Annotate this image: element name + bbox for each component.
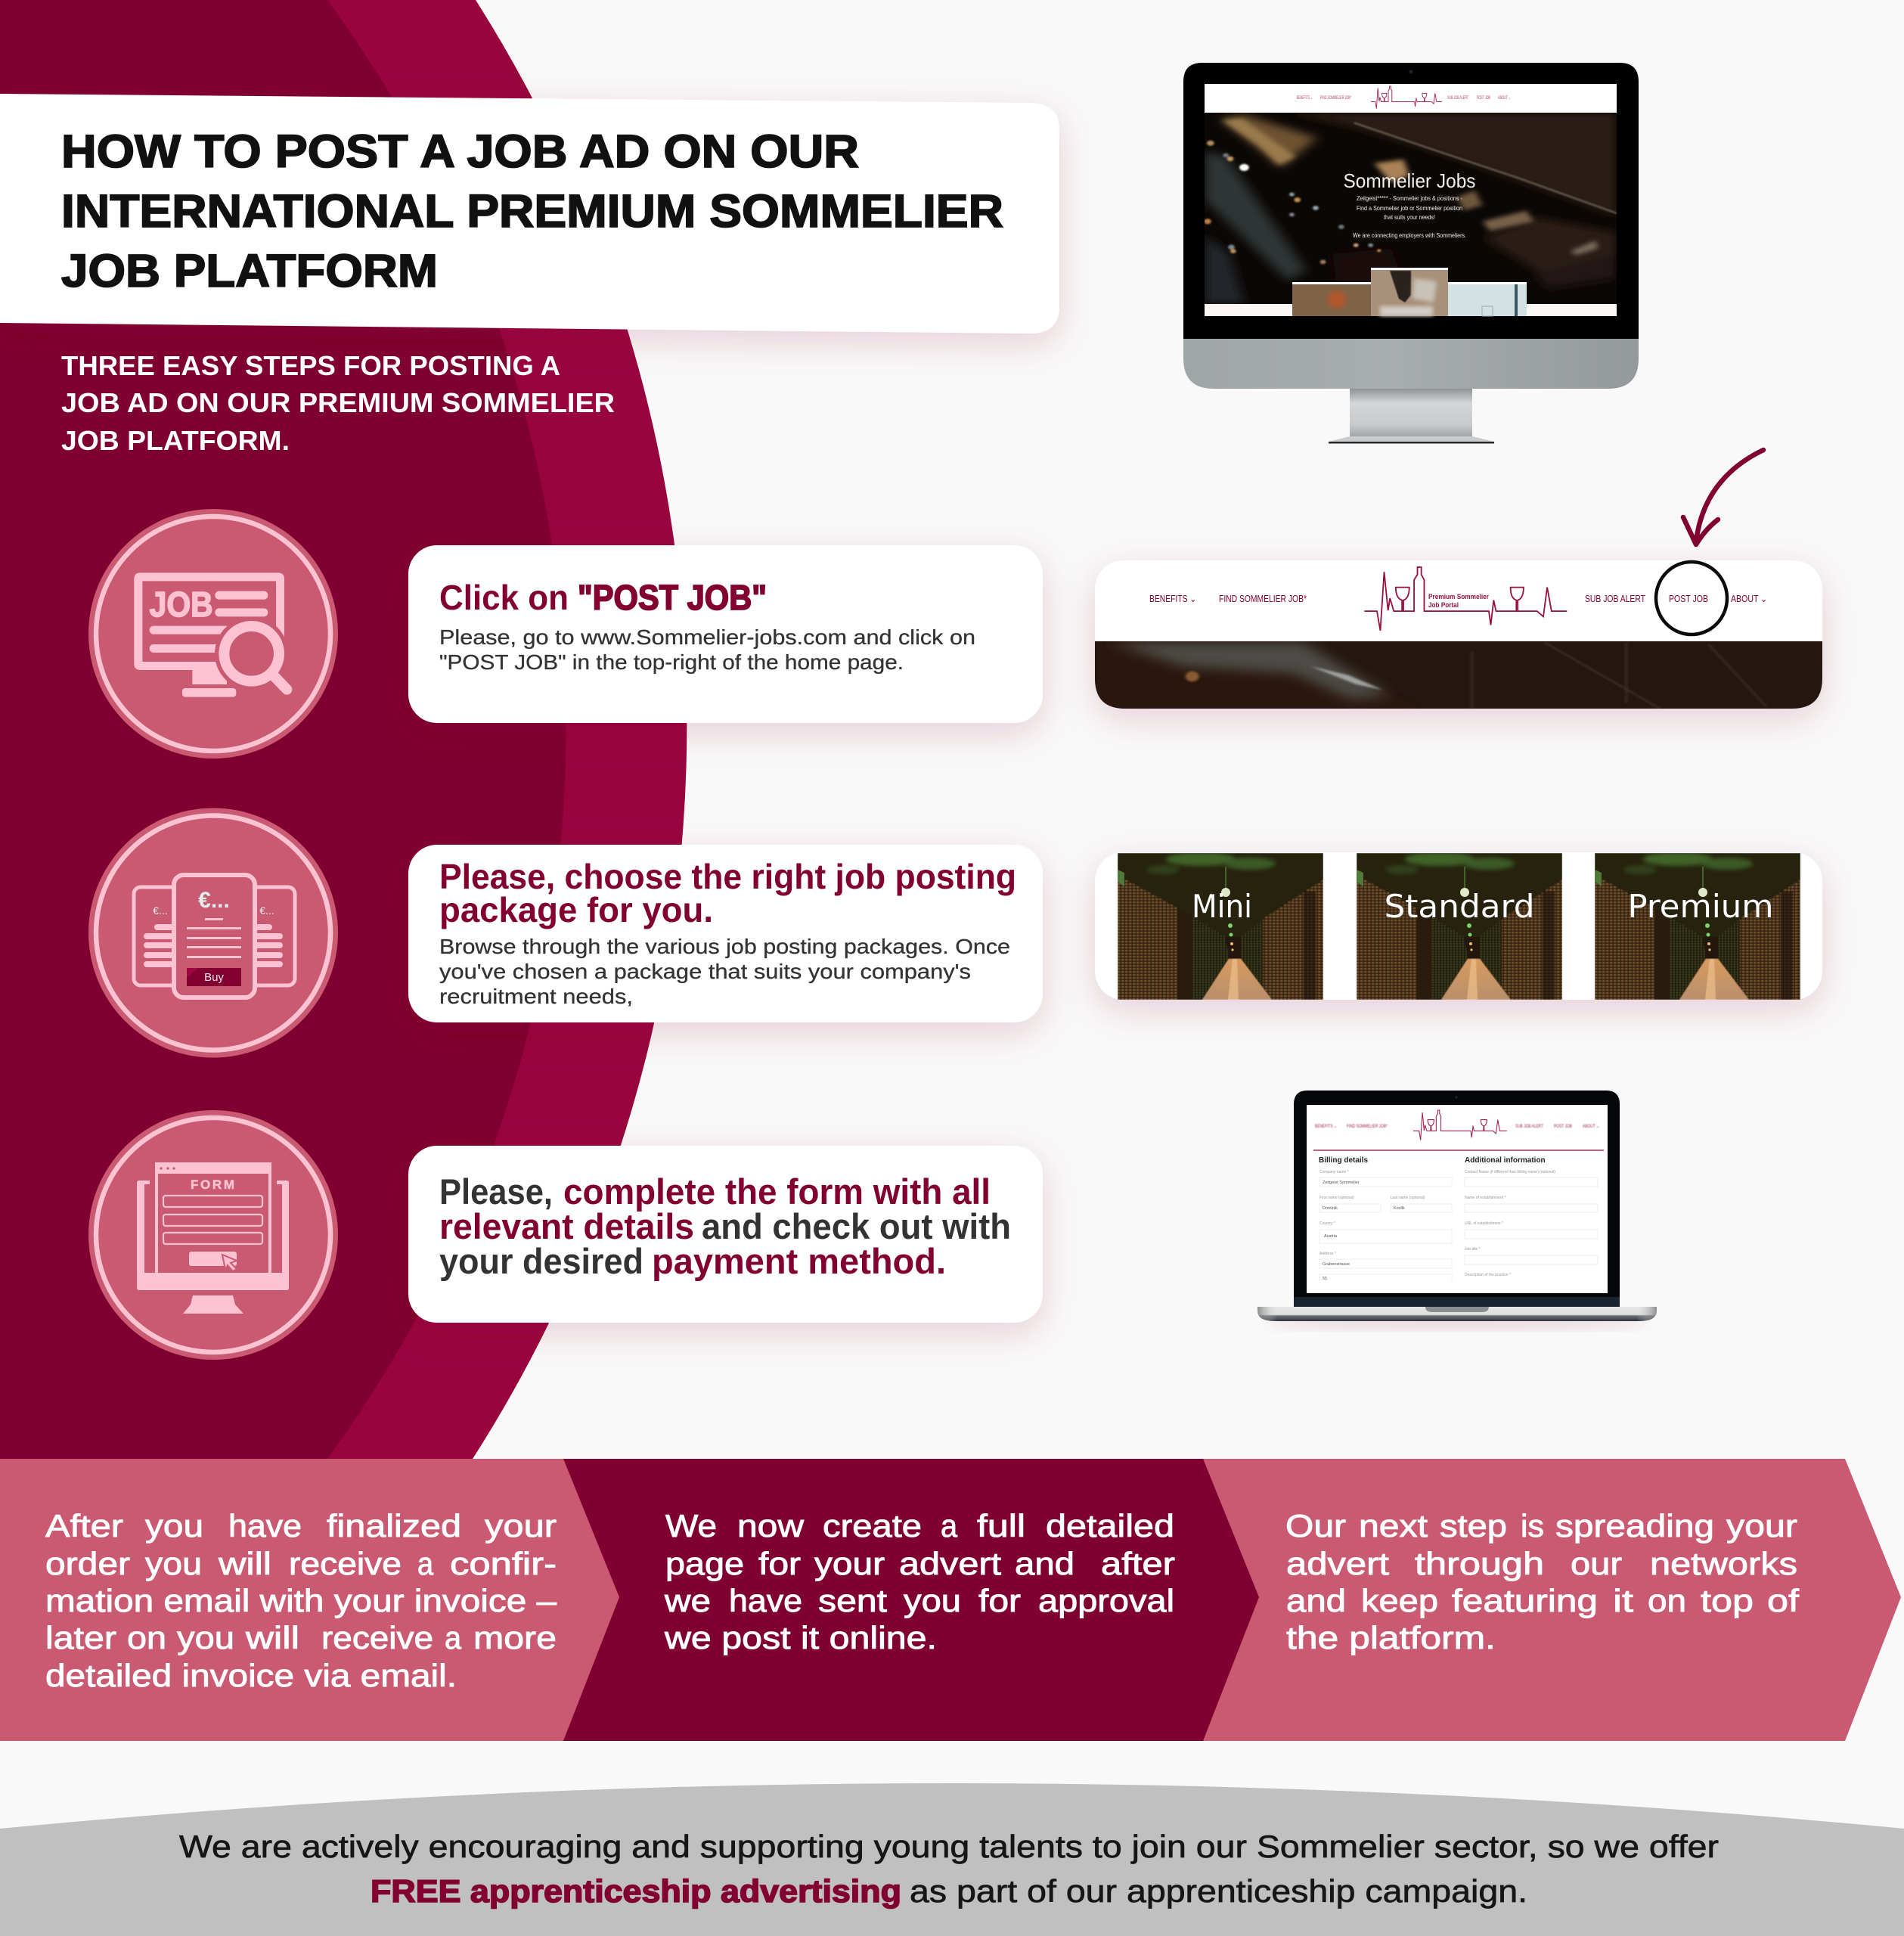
process arrow 2 <box>529 1459 1259 1741</box>
package: Standard <box>1357 852 1562 1000</box>
process text 1: on <box>127 1620 166 1655</box>
process text 3: step <box>1440 1508 1507 1544</box>
highlight circle <box>1656 562 1727 634</box>
monitor hero text: Find a Sommelier job or Sommelier position <box>1357 204 1462 212</box>
icon: pricing packages: Buy <box>204 971 224 984</box>
step 2 heading: Please, choose the right job posting <box>439 857 1016 896</box>
title: HOW TO POST A JOB AD ON OUR <box>61 126 859 177</box>
job packages strip <box>1095 852 1822 1000</box>
icon: pricing packages: €... <box>153 904 168 917</box>
process text 2: create <box>823 1508 922 1544</box>
icon: pricing packages: €... <box>259 904 274 917</box>
step 1 heading: "POST JOB" <box>578 578 767 617</box>
subtitle: JOB PLATFORM. <box>61 425 290 456</box>
process text 3: the platform. <box>1286 1620 1496 1655</box>
logo: Job Portal <box>1428 601 1459 610</box>
desktop monitor mockup <box>1183 63 1639 443</box>
package: Premium: Premium <box>1627 888 1774 925</box>
laptop form <box>1307 1156 1608 1293</box>
laptop form: Grabenstrasse <box>1323 1262 1350 1267</box>
step 2 body: Browse through the various job posting packages. Once <box>439 935 1010 958</box>
process text 3: through <box>1415 1546 1544 1581</box>
laptop form: Kozlik <box>1394 1206 1405 1211</box>
laptop nav: ABOUT ⌄ <box>1583 1124 1599 1129</box>
process text 2: page <box>665 1546 744 1581</box>
process text 2: your <box>814 1546 885 1581</box>
nav labels: SUB JOB ALERT <box>1585 594 1645 604</box>
title: JOB PLATFORM <box>61 245 438 296</box>
laptop form: Description of the position * <box>1465 1273 1511 1277</box>
laptop form: Country * <box>1319 1221 1335 1226</box>
step 3 text: and check out with <box>702 1206 1011 1246</box>
nav photo strip <box>1095 641 1822 709</box>
title card <box>0 94 1059 334</box>
laptop nav: SUB JOB ALERT <box>1515 1124 1543 1129</box>
footer text: FREE apprenticeship advertising <box>371 1873 901 1909</box>
process text 3: your <box>1726 1508 1797 1544</box>
process text 2: after <box>1101 1546 1175 1581</box>
process text 1: detailed invoice via email. <box>45 1658 457 1693</box>
laptop form: Job title * <box>1465 1247 1481 1252</box>
nav labels: ABOUT ⌄ <box>1731 594 1767 604</box>
process text 3: top <box>1701 1583 1754 1618</box>
process text 1: receive <box>289 1546 402 1581</box>
process text 1: more <box>473 1620 557 1655</box>
process text 1: you <box>145 1546 202 1581</box>
step 2 card <box>408 845 1043 1022</box>
step 1 body: "POST JOB" in the top-right of the home page. <box>439 650 904 674</box>
process text 2: a <box>941 1508 958 1544</box>
process text 1: mation email with your invoice – <box>45 1583 557 1618</box>
step 2 body: you've chosen a package that suits your company's <box>439 960 971 983</box>
footer band <box>0 1783 1904 1936</box>
process text 1: finalized <box>327 1508 461 1544</box>
process text 3: networks <box>1650 1546 1797 1581</box>
step 1 card <box>408 545 1043 723</box>
process text 3: keep <box>1361 1583 1438 1618</box>
navigation bar screenshot <box>1095 560 1822 709</box>
process text 1: will <box>218 1546 271 1581</box>
process text 3: is <box>1521 1508 1544 1544</box>
laptop form: 55 <box>1323 1277 1327 1281</box>
laptop nav <box>1315 1124 1599 1129</box>
logo <box>1364 567 1567 631</box>
laptop nav: BENEFITS ⌄ <box>1315 1124 1337 1129</box>
nav labels: POST JOB <box>1669 594 1708 604</box>
process text 1: receive <box>321 1620 433 1655</box>
package: Premium <box>1595 852 1800 1000</box>
package: Mini: Mini <box>1192 888 1252 925</box>
process text 3: on <box>1648 1583 1686 1618</box>
step 3 text: complete the form with all <box>563 1171 991 1212</box>
monitor hero text: We are connecting employers with Sommeliers. <box>1353 231 1466 239</box>
step 3 card <box>408 1146 1043 1323</box>
laptop form: Additional information <box>1465 1156 1546 1165</box>
monitor hero text: Zeitgeist***** - Sommelier jobs & positions - <box>1357 194 1462 202</box>
footer text: as part of our apprenticeship campaign. <box>910 1873 1527 1909</box>
icon: form on monitor: FORM <box>191 1177 234 1192</box>
icon: pricing packages <box>88 808 338 1057</box>
step 3 text: relevant details <box>439 1206 694 1246</box>
process text 1: After <box>45 1508 123 1544</box>
laptop form: Name of establishment * <box>1465 1196 1506 1200</box>
process text 2: We <box>665 1508 717 1544</box>
process text 1: confir- <box>450 1546 557 1581</box>
process text 3: it <box>1613 1583 1633 1618</box>
laptop form: Billing details <box>1319 1156 1368 1165</box>
process text 1: your <box>485 1508 557 1544</box>
process text 2: for <box>758 1546 801 1581</box>
laptop form: Austria <box>1324 1234 1338 1239</box>
process text 2: and <box>1015 1546 1074 1581</box>
monitor thumbnails <box>1292 268 1527 316</box>
process text 2: detailed <box>1046 1508 1174 1544</box>
monitor hero photo <box>1204 113 1617 304</box>
laptop nav: POST JOB <box>1554 1124 1572 1129</box>
step 3 text: your desired <box>439 1241 643 1281</box>
process text 2: advert <box>899 1546 1001 1581</box>
process text 1: have <box>228 1508 302 1544</box>
process text 1: will <box>245 1620 299 1655</box>
laptop form: Company name * <box>1319 1170 1349 1174</box>
process text 2: approval <box>1038 1583 1174 1618</box>
title: INTERNATIONAL PREMIUM SOMMELIER <box>61 185 1003 237</box>
process text 3: advert <box>1286 1546 1389 1581</box>
process text 1: a <box>445 1620 462 1655</box>
process text 2: full <box>977 1508 1025 1544</box>
laptop form: Address * <box>1319 1252 1336 1256</box>
nav labels: FIND SOMMELIER JOB* <box>1219 594 1307 604</box>
process text 2: now <box>737 1508 805 1544</box>
icon: job search monitor <box>88 509 338 759</box>
process text 3: and <box>1286 1583 1346 1618</box>
step 1 body: Please, go to www.Sommelier-jobs.com and click on <box>439 625 975 649</box>
monitor nav <box>1297 86 1511 109</box>
icon: job search monitor: JOB <box>150 585 213 624</box>
monitor nav: ABOUT ⌄ <box>1498 96 1511 101</box>
laptop nav: FIND SOMMELIER JOB* <box>1347 1124 1388 1129</box>
process text 1: a <box>417 1546 434 1581</box>
laptop form: First name (optional) <box>1319 1196 1354 1200</box>
process text 2: we <box>664 1583 711 1618</box>
process text 1: you <box>145 1508 203 1544</box>
process text 2: sent <box>818 1583 887 1618</box>
arrow pointing at POST JOB <box>1683 450 1763 544</box>
process text 2: for <box>978 1583 1021 1618</box>
nav labels: BENEFITS ⌄ <box>1149 594 1196 604</box>
monitor hero text <box>1343 169 1476 239</box>
laptop form: Zeitgeist Sommelier <box>1323 1181 1360 1185</box>
monitor nav: FIND SOMMELIER JOB* <box>1320 96 1351 101</box>
laptop form: URL of establishment * <box>1465 1221 1503 1226</box>
step 3 text: Please, <box>439 1171 553 1212</box>
process text 3: featuring <box>1452 1583 1598 1618</box>
background shape: inner dark arc <box>0 0 566 1459</box>
step 2 body: recruitment needs, <box>439 985 633 1008</box>
monitor hero text: Sommelier Jobs <box>1343 169 1476 192</box>
process text 1: you <box>177 1620 234 1655</box>
laptop mockup <box>1257 1091 1657 1329</box>
icon: form on monitor <box>88 1110 338 1360</box>
process text 1: order <box>45 1546 130 1581</box>
process arrow 3 <box>1134 1459 1901 1741</box>
process text 3: Our <box>1285 1508 1346 1544</box>
subtitle: THREE EASY STEPS FOR POSTING A <box>61 350 560 381</box>
logo: Premium Sommelier <box>1428 593 1489 601</box>
icon: pricing packages: €... <box>198 888 230 913</box>
footer text: We are actively encouraging and supporting young talents to join our Sommelier sector, so we offer <box>179 1829 1719 1864</box>
background shape: outer crimson arc <box>0 0 687 1459</box>
step 1 heading: Click on <box>439 578 569 617</box>
process text 3: spreading <box>1555 1508 1714 1544</box>
package: Mini <box>1118 852 1323 1000</box>
monitor nav: BENEFITS ⌄ <box>1297 96 1313 101</box>
laptop form: Contact Name (if different than billing name) (optional) <box>1465 1170 1555 1174</box>
process text 1: later <box>45 1620 116 1655</box>
monitor hero text: that suits your needs! <box>1384 213 1435 221</box>
subtitle: JOB AD ON OUR PREMIUM SOMMELIER <box>61 387 615 418</box>
step 2 heading: package for you. <box>439 890 713 929</box>
monitor nav: POST JOB <box>1477 96 1490 101</box>
laptop form: Dominik <box>1323 1206 1338 1211</box>
package: Standard: Standard <box>1384 888 1535 925</box>
process text 3: of <box>1767 1583 1799 1618</box>
process text 2: we post it online. <box>664 1620 937 1655</box>
laptop form: Last name (optional) <box>1391 1196 1425 1200</box>
process text 3: our <box>1571 1546 1622 1581</box>
monitor nav: SUB JOB ALERT <box>1447 96 1468 101</box>
process text 2: you <box>904 1583 961 1618</box>
process text 3: next <box>1359 1508 1428 1544</box>
process text 2: have <box>729 1583 802 1618</box>
process arrow 1 <box>0 1459 619 1741</box>
step 3 text: payment method. <box>652 1241 946 1281</box>
